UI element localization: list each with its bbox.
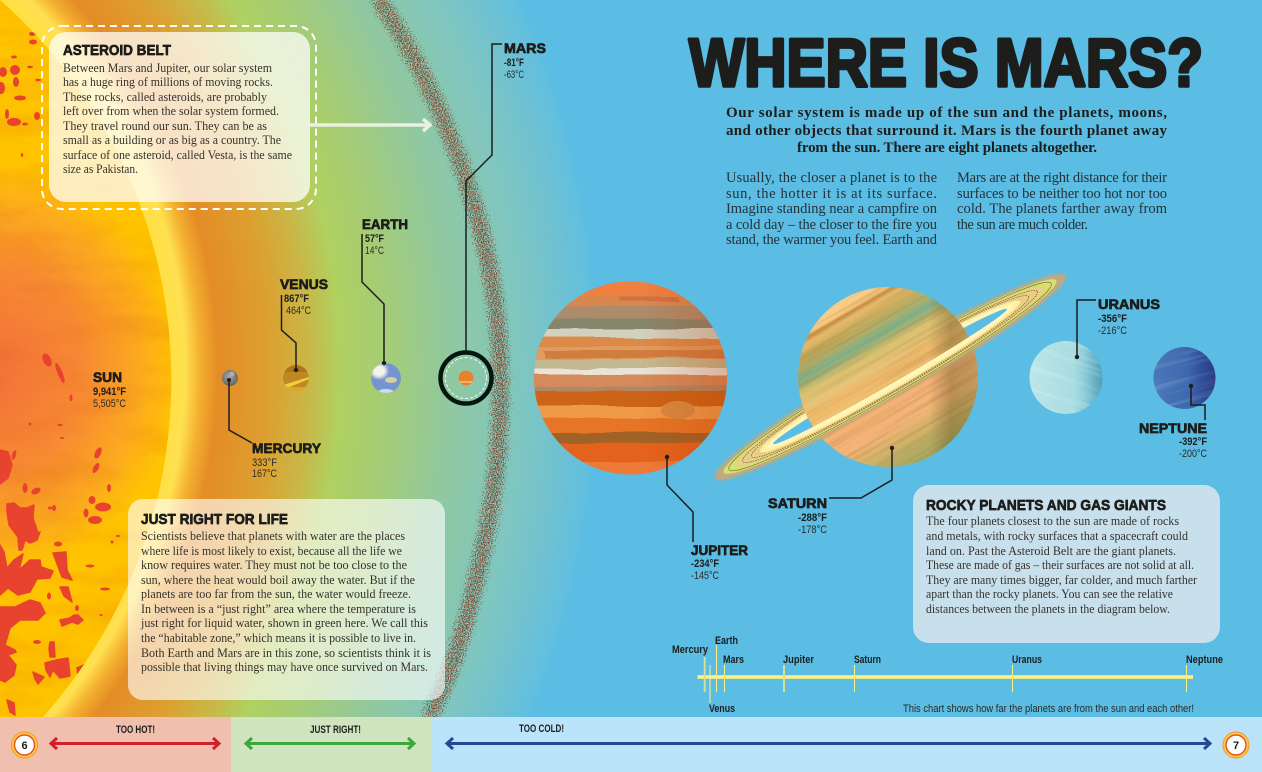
Earth leader line and label: 57°F <box>365 233 384 245</box>
page number 7: 7 <box>1233 740 1239 752</box>
Mercury leader line and label: MERCURY <box>252 440 322 456</box>
body text: right column: cold. The planets farther away from <box>957 201 1168 217</box>
Uranus leader line and label: URANUS <box>1098 296 1160 312</box>
body text: asteroid belt <box>63 60 292 176</box>
body text: just right for life: In between is a “just right” area where the temperature is <box>141 601 416 616</box>
Earth leader line and label <box>362 216 408 365</box>
arrow: too hot <box>51 738 219 749</box>
body text: right column: the sun are much colder. <box>957 217 1088 233</box>
Venus leader line and label <box>280 276 328 372</box>
Mercury leader line and label: 333°F <box>252 457 277 469</box>
heading: rocky planets and gas giants: ROCKY PLANETS AND GAS GIANTS <box>926 497 1166 514</box>
body text: just right for life: possible that living things may have once survived on Mars. <box>141 659 428 674</box>
panel: asteroid belt <box>42 26 316 209</box>
chart: planet distances from the sun: Mars <box>723 654 744 666</box>
sun disc with solar flares <box>0 0 175 717</box>
chart: planet distances from the sun: Jupiter <box>783 654 815 666</box>
body text: just right for life: planets are too far from the sun, the water would freeze. <box>141 586 411 601</box>
sun label: SUN <box>93 369 122 385</box>
intro paragraph <box>726 105 1168 156</box>
body text: rocky planets and gas giants: They are many times bigger, far colder, and much farther <box>926 572 1198 587</box>
body text: right column: surfaces to be neither too hot nor too <box>957 186 1167 202</box>
body text: left column <box>726 170 938 248</box>
asteroid belt band <box>372 0 500 725</box>
footer: just right zone <box>231 717 431 772</box>
body text: asteroid belt: They travel round our sun. They can be as <box>63 118 267 133</box>
Uranus leader line and label: -216°C <box>1098 325 1127 337</box>
body text: right column: Mars are at the right distance for their <box>957 170 1167 186</box>
Saturn planet and rings <box>713 272 1068 482</box>
Mercury leader line and label: 167°C <box>252 468 277 480</box>
Uranus leader line and label: -356°F <box>1098 313 1127 325</box>
body text: right column <box>957 170 1168 233</box>
body text: just right for life: Scientists believe that planets with water are the places <box>141 528 405 543</box>
footer: just right zone: JUST RIGHT! <box>310 724 361 736</box>
Venus leader line and label: 464°C <box>286 305 311 317</box>
intro paragraph: Our solar system is made up of the sun and the planets, moons, <box>726 105 1167 121</box>
body text: rocky planets and gas giants: distances between the planets in the diagram below. <box>926 601 1170 616</box>
Neptune leader line and label: NEPTUNE <box>1139 420 1207 436</box>
chart: planet distances from the sun: Uranus <box>1012 654 1042 666</box>
Venus leader line and label: VENUS <box>280 276 328 292</box>
chart: planet distances from the sun: Saturn <box>854 654 881 666</box>
chart: planet distances from the sun <box>672 635 1223 715</box>
body text: rocky planets and gas giants: The four planets closest to the sun are made of rocks <box>926 513 1179 528</box>
body text: just right for life <box>140 528 431 674</box>
Mars leader line and label: -81°F <box>504 57 524 69</box>
footer: too cold zone: TOO COLD! <box>519 723 564 735</box>
Venus planet <box>283 365 309 391</box>
Mercury planet <box>222 370 238 386</box>
body text: asteroid belt: has a huge ring of millions of moving rocks. <box>63 74 273 89</box>
Saturn leader line and label: SATURN <box>768 495 827 511</box>
page number 6: 6 <box>21 740 28 752</box>
body text: asteroid belt: These rocks, called asteroids, are probably <box>63 89 267 104</box>
chart: planet distances from the sun: Venus <box>709 703 735 715</box>
body text: just right for life: where life is most likely to exist, because all the life we <box>141 543 402 558</box>
Earth leader line and label: 14°C <box>365 245 384 257</box>
Neptune planet <box>1154 347 1216 409</box>
body text: asteroid belt: small as a building or as big as a country. The <box>63 132 281 147</box>
Earth planet <box>371 363 401 395</box>
Saturn leader line and label: -288°F <box>798 512 827 524</box>
body text: left column: stand, the warmer you feel. Earth and <box>726 232 938 248</box>
footer: too hot zone <box>0 717 231 772</box>
body text: asteroid belt: left over from when the solar system formed. <box>63 103 279 118</box>
Jupiter leader line and label <box>665 455 748 582</box>
Mars leader line and label: -63°C <box>504 69 524 81</box>
body text: rocky planets and gas giants: These are made of gas – their surfaces are not solid at all. <box>926 557 1194 572</box>
body text: just right for life: Both Earth and Mars are in this zone, so scientists think it is <box>141 645 431 660</box>
body text: left column: sun, the hotter it is at its surface. <box>726 186 937 202</box>
Mars planet with highlight circle <box>440 352 492 404</box>
body text: just right for life: sun, where the heat would boil away the water. But if the <box>141 572 415 587</box>
arrow: just right <box>246 738 414 749</box>
Venus leader line and label: 867°F <box>284 293 309 305</box>
sun label: 9,941°F <box>93 386 126 398</box>
chart: planet distances from the sun: Neptune <box>1186 654 1223 666</box>
sun label <box>93 369 126 410</box>
Neptune leader line and label: -200°C <box>1179 448 1207 460</box>
body text: rocky planets and gas giants <box>926 513 1198 616</box>
body text: rocky planets and gas giants: apart than the rocky planets. You can see the relative <box>926 586 1173 601</box>
body text: asteroid belt: size as Pakistan. <box>63 161 138 176</box>
Saturn leader line and label <box>768 446 894 536</box>
Jupiter planet <box>534 282 727 474</box>
Mercury leader line and label <box>227 378 322 480</box>
body text: rocky planets and gas giants: land on. Past the Asteroid Belt are the giant planets. <box>926 543 1176 558</box>
intro paragraph: and other objects that surround it. Mars is the fourth planet away <box>726 123 1168 139</box>
Jupiter leader line and label: -234°F <box>691 558 719 570</box>
Uranus leader line and label <box>1075 296 1160 359</box>
footer: too hot zone: TOO HOT! <box>116 724 155 736</box>
Neptune leader line and label: -392°F <box>1179 436 1207 448</box>
arrow: callout to asteroid belt <box>310 119 430 131</box>
Earth leader line and label: EARTH <box>362 216 408 232</box>
body text: left column: a cold day – the closer to the fire you <box>726 217 937 233</box>
body text: asteroid belt: surface of one asteroid, called Vesta, is the same <box>63 147 292 162</box>
chart caption: This chart shows how far the planets are from the sun and each other! <box>903 703 1194 715</box>
Mars leader line and label: MARS <box>504 40 546 56</box>
sun label: 5,505°C <box>93 398 126 410</box>
body text: asteroid belt: Between Mars and Jupiter, our solar system <box>63 60 272 75</box>
heading: just right for life: JUST RIGHT FOR LIFE <box>141 511 288 528</box>
page number 6 <box>12 732 38 758</box>
footer: too cold zone <box>431 717 1262 772</box>
heading: asteroid belt: ASTEROID BELT <box>63 42 171 59</box>
body text: just right for life: just right for liquid water, shown in green here. We call this <box>140 615 428 630</box>
Jupiter leader line and label: -145°C <box>691 570 719 582</box>
Neptune leader line and label <box>1139 384 1207 460</box>
Jupiter leader line and label: JUPITER <box>691 542 748 558</box>
chart: planet distances from the sun: Mercury <box>672 644 709 656</box>
page number 7 <box>1223 732 1249 758</box>
panel: rocky planets and gas giants <box>913 485 1220 643</box>
Mars leader line and label <box>466 40 546 351</box>
body text: left column: Usually, the closer a planet is to the <box>726 170 937 186</box>
intro paragraph: from the sun. There are eight planets altogether. <box>797 140 1097 156</box>
arrow: too cold <box>447 738 1210 749</box>
body text: rocky planets and gas giants: and metals, with rocky surfaces that a spacecraft could <box>926 528 1188 543</box>
Uranus planet <box>1030 341 1102 414</box>
Saturn leader line and label: -178°C <box>798 524 827 536</box>
body text: left column: Imagine standing near a campfire on <box>726 201 938 217</box>
body text: just right for life: the “habitable zone,” which means it is possible to live in. <box>141 630 416 645</box>
body text: just right for life: know requires water. They must not be too close to the <box>141 557 407 572</box>
chart: planet distances from the sun: Earth <box>715 635 738 647</box>
panel: just right for life <box>128 499 445 700</box>
